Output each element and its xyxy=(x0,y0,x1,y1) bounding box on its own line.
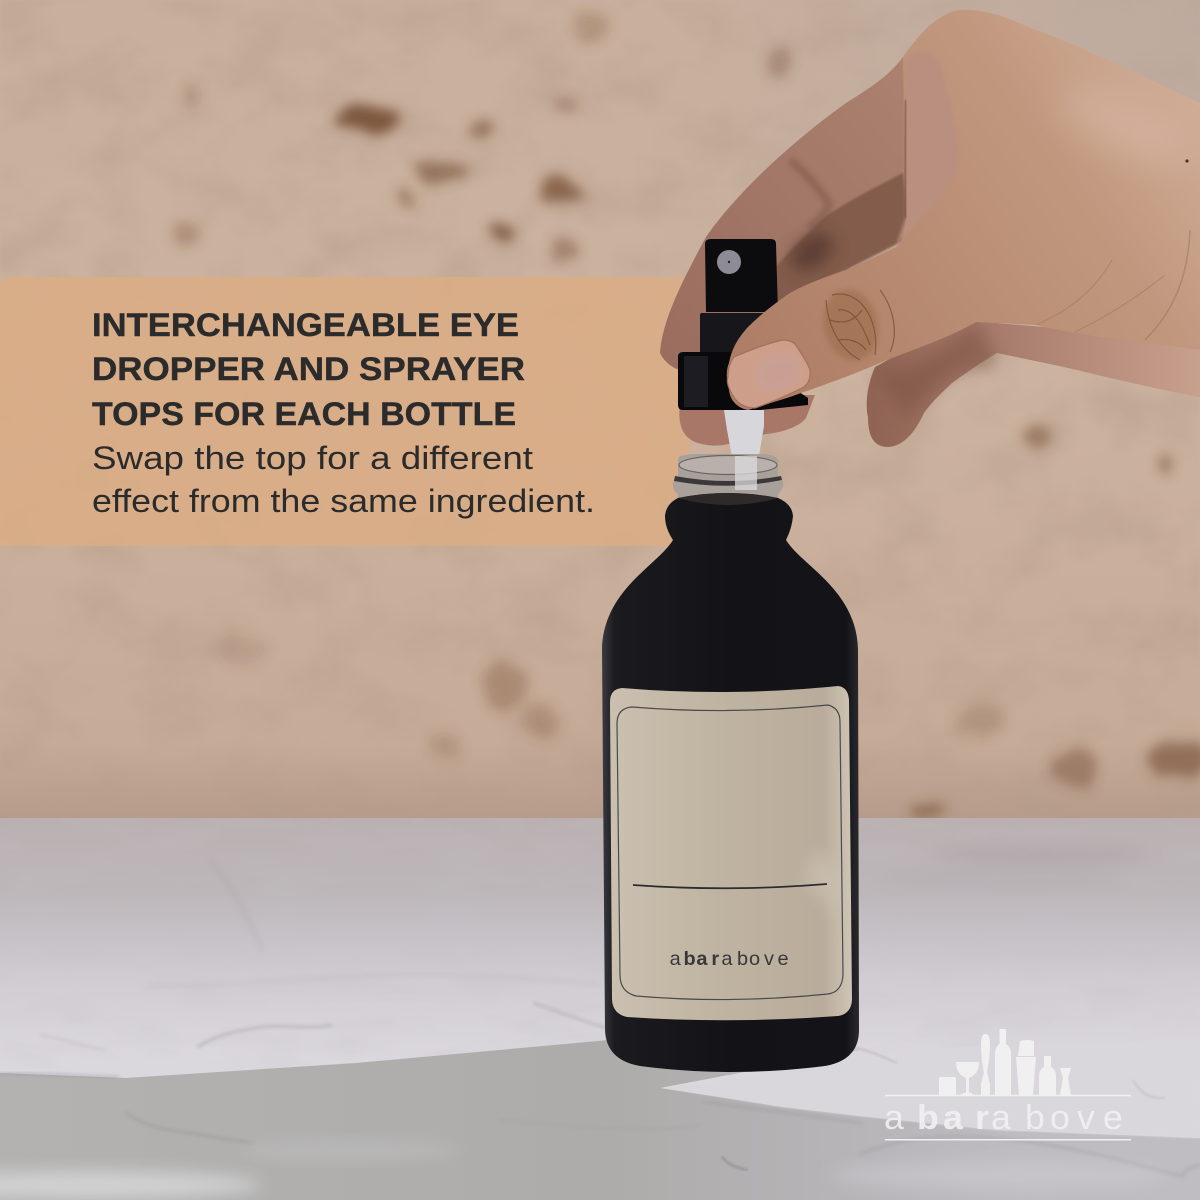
middle finger xyxy=(679,395,815,446)
label logo text: bar xyxy=(684,948,720,970)
dip tube xyxy=(724,410,764,462)
logo wordmark: a xyxy=(884,1099,904,1137)
body text: effect from the same ingredient. xyxy=(92,483,595,519)
brand logo xyxy=(884,1029,1131,1140)
thumbnail xyxy=(727,340,810,408)
heading: DROPPER AND SPRAYER xyxy=(92,351,525,387)
logo wordmark: above xyxy=(991,1099,1123,1137)
collar xyxy=(700,313,770,354)
body text xyxy=(92,440,595,519)
heading xyxy=(92,307,525,432)
bottle xyxy=(602,454,859,1072)
wall background xyxy=(0,0,1200,825)
nozzle xyxy=(717,250,741,274)
hand: index finger xyxy=(660,57,925,372)
marble floor xyxy=(0,818,1200,1200)
logo wordmark: bar xyxy=(917,1099,989,1137)
thumb-to-hand fold xyxy=(896,51,958,247)
bottle body xyxy=(602,493,859,1072)
cap xyxy=(678,352,808,410)
actuator xyxy=(705,239,778,312)
thumb knuckle xyxy=(817,284,894,366)
hand: back and thumb xyxy=(727,10,1200,410)
text band xyxy=(0,277,690,546)
label logo text: a xyxy=(670,948,681,970)
body text: Swap the top for a different xyxy=(92,440,533,476)
glass neck xyxy=(673,454,783,506)
floor shadow xyxy=(0,1040,1200,1200)
heading: TOPS FOR EACH BOTTLE xyxy=(92,396,516,432)
heading: INTERCHANGEABLE EYE xyxy=(92,307,519,343)
sprayer top xyxy=(678,239,808,462)
label xyxy=(610,686,852,1020)
icon: bar bottles xyxy=(939,1029,1071,1095)
hand: lower fingers xyxy=(679,320,1200,447)
label logo text: above xyxy=(721,948,789,970)
